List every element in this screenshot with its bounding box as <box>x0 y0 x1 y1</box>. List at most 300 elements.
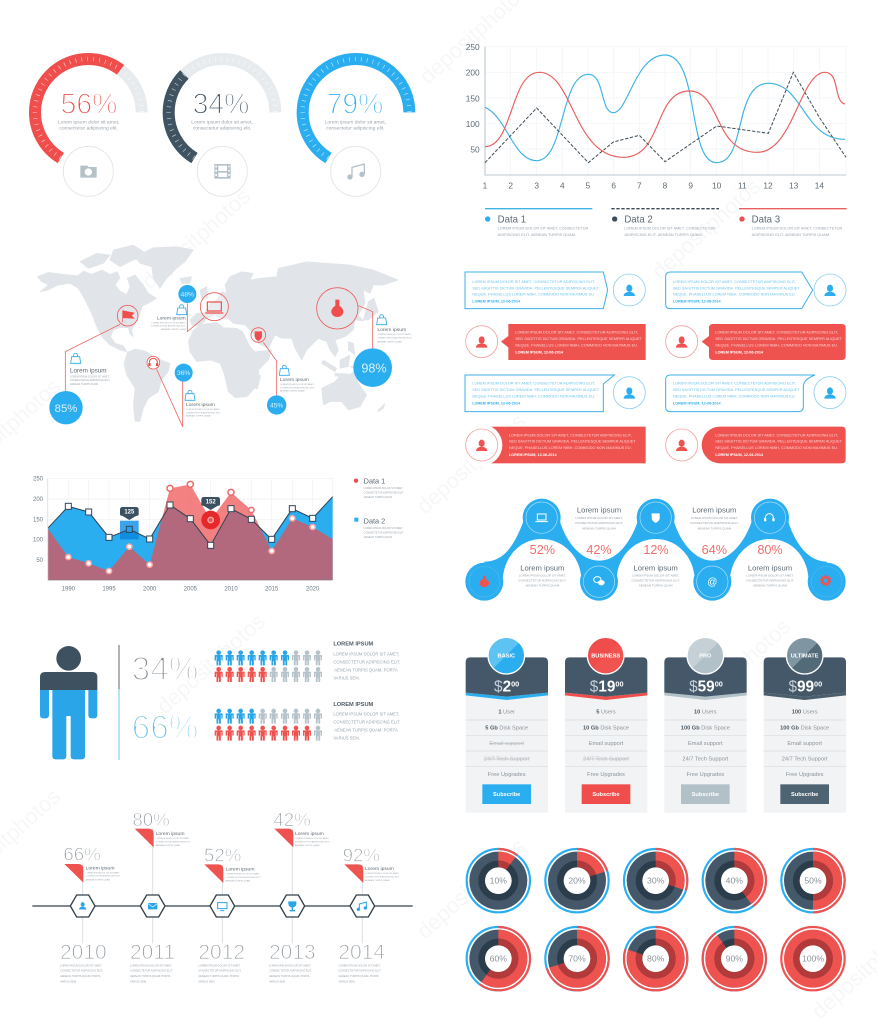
text: bottom 1: Lorem ipsum <box>520 563 564 572</box>
legend: data 3 <box>739 209 847 237</box>
plan: ultimate: $99 <box>788 679 814 696</box>
plan: ultimate: Free Upgrades <box>786 772 824 778</box>
x axis labels: 2015 <box>265 587 279 593</box>
text: bottom 2: LOREM IPSUM DOLOR SIT AMET, <box>632 573 679 577</box>
callout: 48%: CONSECTETUR ADIPISCING ELIT. <box>151 325 186 328</box>
panel: world map <box>37 245 413 427</box>
x axis labels: 1995 <box>102 587 116 593</box>
legend: data 3: ADIPISCING ELIT. AENEAN TURPIS QUAM <box>752 233 829 237</box>
bubble: blue arrow rounded: SED SAGITTIS DICTUM GRAVIDA. PELLENTESQUE SEMPER ALIQUET <box>673 286 800 290</box>
plan: pro: Free Upgrades <box>686 772 724 778</box>
plan: basic: Subscribe <box>493 792 520 798</box>
legend: data 2: LOREM IPSUM DOLOR SIT AMET, <box>364 527 403 530</box>
callout: 36%: 36% <box>177 370 190 377</box>
milestone: 2012: 52% <box>204 845 241 866</box>
milestone: 2012: AENEAN TURPIS QUAM <box>226 880 250 883</box>
data 1 markers <box>66 481 315 574</box>
bubble: blue tail rounded: LOREM IPSUM DOLOR SIT AMET, CONSECTETUR ADIPISCING ELIT, <box>673 382 796 386</box>
callout: 48%: 48% <box>181 291 194 298</box>
x axis labels <box>62 587 320 593</box>
text: top 1 <box>575 506 623 530</box>
stat: 66%: 66% <box>132 709 198 746</box>
donut: 40%: 40% <box>726 876 743 886</box>
text: top 1: LOREM IPSUM DOLOR SIT AMET, <box>575 516 623 520</box>
bubble: red halo square <box>461 424 646 466</box>
callout: 45%: 45% <box>270 402 283 409</box>
marker: headset <box>147 356 160 369</box>
callout: 45%: Lorem ipsum <box>280 377 309 383</box>
x axis labels: 8 <box>663 181 668 191</box>
x axis labels: 1 <box>483 181 488 191</box>
text: top 1: Lorem ipsum <box>577 506 621 515</box>
y axis labels <box>33 477 44 564</box>
milestone: 2011: 2011 <box>130 941 175 964</box>
marker: laptop <box>200 293 228 321</box>
watermark: depositphotos <box>412 408 530 519</box>
donut: 40% <box>703 849 766 912</box>
series: data 2 <box>485 72 846 163</box>
divider <box>117 645 120 689</box>
bubble: blue arrow square <box>465 272 645 309</box>
plan: ultimate: 00 <box>814 679 822 688</box>
text: bottom 3: CONSECTETUR ADIPISCING ELIT, <box>746 578 794 582</box>
legend: data 2 <box>354 516 404 539</box>
gauge: 79%: 79% <box>327 88 383 120</box>
plan: business: $19 <box>590 679 615 696</box>
milestone: 2013: LOREM IPSUM DOLOR SIT AMET, <box>269 963 311 967</box>
y axis labels <box>466 42 480 154</box>
percentages: 80% <box>757 543 783 557</box>
plan: pro: PRO <box>699 654 712 660</box>
callout: 45%: AENEAN TURPIS QUAM <box>280 390 305 393</box>
legend: data 1 <box>354 476 404 499</box>
milestone: 2011: AENEAN TURPIS QUAM <box>156 844 180 847</box>
plan: ultimate: Email support <box>787 741 822 747</box>
milestone: 2012: LOREM IPSUM DOLOR SIT AMET, <box>226 873 260 876</box>
x axis labels: 13 <box>789 181 799 191</box>
x axis labels: 10 <box>712 181 722 191</box>
plan: basic: 1 User <box>498 710 515 716</box>
milestone: 2011: AENEAN TURPIS QUAM, PORTA <box>130 974 171 978</box>
text block 2: LOREM IPSUM DOLOR SIT AMET, <box>333 712 399 717</box>
bubble: blue arrow square: SED SAGITTIS DICTUM GRAVIDA. PELLENTESQUE SEMPER ALIQUET <box>472 286 600 290</box>
percentages <box>530 543 783 557</box>
callout: 98%: CONSECTETUR ADIPISCING ELIT. <box>377 337 413 340</box>
icon: music <box>347 164 365 180</box>
bubble: blue arrow rounded: LOREM IPSUM DOLOR SIT AMET, CONSECTETUR ADIPISCING ELIT, <box>673 280 796 284</box>
bubble: blue arrow square: LOREM IPSUM, 12-06-2014 <box>472 299 521 303</box>
legend: data 1: AENEAN TURPIS QUAM <box>364 496 392 499</box>
highlight band at 1997 <box>120 521 139 539</box>
milestone: 2014: VARIUS SEM. <box>338 979 356 983</box>
big person figure <box>40 646 97 759</box>
data 2 outline <box>48 497 333 545</box>
donut: 80% <box>624 927 687 990</box>
plan: business: Email support <box>589 741 624 747</box>
text: top 2: CONSECTETUR ADIPISCING ELIT, <box>690 521 739 525</box>
map continents <box>37 245 398 422</box>
text block 2: VARIUS SEM. <box>333 736 360 741</box>
node: laptop <box>523 499 561 537</box>
y axis labels: 250 <box>33 477 44 483</box>
text: bottom 2: Lorem ipsum <box>634 563 678 572</box>
donut: 80%: 80% <box>647 954 665 964</box>
milestone: 2013: 2013 <box>269 941 316 964</box>
text block 1: LOREM IPSUM DOLOR SIT AMET, <box>333 651 399 656</box>
bubble: blue arrow rounded: LOREM IPSUM, 12-06-2014 <box>673 299 722 303</box>
milestone: 2010: Lorem ipsum <box>86 865 114 871</box>
callout: 98% <box>353 315 413 387</box>
plan: pro: 00 <box>715 679 723 688</box>
donut: 10% <box>467 849 530 912</box>
area: data 1 <box>48 484 333 580</box>
milestone: 2010: AENEAN TURPIS QUAM <box>86 878 110 881</box>
plan: ultimate: 100 Gb Disk Space <box>780 725 829 731</box>
bubble: blue arrow square: NEQUE. PHASELLUS LOREM NIBH, COMMODO NON MAXIMUS EU. <box>472 293 595 297</box>
plan: pro: 24/7 Tech Support <box>682 756 729 762</box>
plan: pro: $59 <box>689 679 715 696</box>
milestone: 2011: VARIUS SEM. <box>130 979 147 983</box>
x axis labels: 6 <box>611 181 616 191</box>
percentages: 64% <box>702 543 727 557</box>
bubble: red pill rounded <box>666 427 846 463</box>
pictogram rows 34% <box>215 650 322 682</box>
callout: 36%: LOREM IPSUM DOLOR SIT AMET, <box>186 408 221 411</box>
callout: 48%: Lorem ipsum <box>157 316 186 322</box>
watermark: depositphotos <box>137 183 255 294</box>
node: gear <box>808 563 846 601</box>
bubble: red pill rounded: LOREM IPSUM, 12-06-2014 <box>715 453 764 457</box>
icon: camera <box>80 166 97 178</box>
highlight at 2007 <box>201 511 220 529</box>
donut: 20% <box>545 849 609 912</box>
bubble: blue tail rounded: NEQUE. PHASELLUS LOREM NIBH, COMMODO NON MAXIMUS EU. <box>673 394 796 398</box>
text: top 1: AENEAN TURPIS QUAM <box>582 526 616 530</box>
legend: data 2: Data 2 <box>364 516 385 525</box>
plan: pro: 10 Users <box>694 710 717 716</box>
milestone: 2014: AENEAN TURPIS QUAM <box>365 879 390 882</box>
milestone: 2014: AENEAN TURPIS QUAM, PORTA <box>338 974 379 978</box>
donut: 100% <box>781 927 845 990</box>
legend: data 1: ADIPISCING ELIT. AENEAN TURPIS QUAM <box>498 233 575 237</box>
legend: data 2: ADIPISCING ELIT. AENEAN TURPIS QUAM <box>624 233 702 237</box>
plan: basic: 5 Gb Disk Space <box>485 725 528 731</box>
donut: 30%: 30% <box>647 876 665 886</box>
milestone: 2010 <box>60 844 121 983</box>
text: bottom 3: Lorem ipsum <box>748 563 792 572</box>
milestone: 2013: VARIUS SEM. <box>269 979 286 983</box>
milestone: 2013: LOREM IPSUM DOLOR SIT AMET, <box>295 837 330 840</box>
milestone: 2014: 92% <box>343 845 380 866</box>
milestone: 2011: CONSECTETUR ADIPISCING ELIT. <box>156 840 191 843</box>
gauge: 79%: consectetur adipiscing elit. <box>326 125 385 131</box>
milestone: 2012: CONSECTETUR ADIPISCING ELIT. <box>226 876 261 879</box>
callout: 48% <box>151 285 196 331</box>
panel: radial gauges <box>35 59 409 196</box>
y axis labels: 200 <box>33 497 44 503</box>
milestone: 2014: 2014 <box>338 941 385 964</box>
text: bottom 2: CONSECTETUR ADIPISCING ELIT, <box>632 578 680 582</box>
donut: 60% <box>467 927 530 990</box>
milestone: 2012: AENEAN TURPIS QUAM, PORTA <box>198 974 239 978</box>
panel: people statistics <box>40 642 401 760</box>
milestone: 2014: CONSECTETUR ADIPISCING ELIT. <box>365 875 400 878</box>
donut: 90%: 90% <box>726 954 743 964</box>
x axis labels: 2005 <box>184 587 198 593</box>
milestone: 2011: Lorem ipsum <box>156 831 184 837</box>
plan: business: 24/7 Tech Support <box>583 756 629 762</box>
x axis labels: 11 <box>738 181 747 191</box>
text block 1 <box>333 642 401 680</box>
x axis labels <box>483 181 824 191</box>
y axis labels: 150 <box>33 517 44 523</box>
plan: ultimate <box>764 637 846 813</box>
x axis labels: 14 <box>815 181 824 191</box>
gauge: 56%: 56% <box>61 88 117 120</box>
legend: data 2: CONSECTETUR ADIPISCING ELIT. <box>364 531 404 534</box>
text: bottom 1: AENEAN TURPIS QUAM <box>525 584 560 588</box>
callout: 85% <box>49 353 110 424</box>
gauge: 79% <box>303 59 409 196</box>
legend: data 1: LOREM IPSUM DOLOR SIT AMET, CONSECTETUR <box>498 227 589 231</box>
legend: data 2: Data 2 <box>624 215 653 226</box>
text block 2: AENEAN TURPIS QUAM, PORTA <box>334 728 398 733</box>
x axis labels: 2010 <box>224 587 238 593</box>
bubble: blue tail square <box>465 375 645 412</box>
stat: 34%: 34% <box>132 651 198 688</box>
milestone: 2013: Lorem ipsum <box>295 831 324 837</box>
x axis labels: 9 <box>688 181 693 191</box>
milestone: 2011 <box>130 809 191 983</box>
milestone: 2010: CONSECTETUR ADIPISCING ELIT. <box>86 875 121 878</box>
bubble: blue tail rounded: LOREM IPSUM, 12-06-2014 <box>673 401 722 405</box>
callout: 45%: CONSECTETUR ADIPISCING ELIT. <box>280 386 315 389</box>
plan: basic: Free Upgrades <box>488 772 526 778</box>
callout: 85%: Lorem ipsum <box>70 367 107 374</box>
milestone: 2010: VARIUS SEM. <box>60 979 77 983</box>
gauge: 34%: consectetur adipiscing elit. <box>193 125 251 131</box>
text: bottom 3: AENEAN TURPIS QUAM <box>753 584 787 588</box>
text: top 2: Lorem ipsum <box>692 506 736 515</box>
x axis labels: 2000 <box>143 587 157 593</box>
text block 1: AENEAN TURPIS QUAM, PORTA <box>334 667 398 672</box>
panel: testimonial bubbles <box>461 272 846 466</box>
text block 2: CONSECTETUR ADIPISCING ELIT. <box>333 720 401 725</box>
bubble: red halo square: LOREM IPSUM, 12-06-2014 <box>509 453 558 457</box>
marker: flask <box>317 288 358 329</box>
callout: 48%: AENEAN TURPIS QUAM <box>161 328 186 331</box>
bubble: red pill rounded: SED SAGITTIS DICTUM GRAVIDA. PELLENTESQUE SEMPER ALIQUET <box>715 440 843 444</box>
milestone: 2013: CONSECTETUR ADIPISCING ELIT, <box>269 969 312 973</box>
donut: 50%: 50% <box>804 876 822 886</box>
node: at sign: @ <box>707 577 717 588</box>
callout: 36%: AENEAN TURPIS QUAM <box>186 415 211 418</box>
legend: data 2: LOREM IPSUM DOLOR SIT AMET, CONSECTETUR <box>624 227 716 231</box>
bubble: blue arrow square: LOREM IPSUM DOLOR SIT AMET, CONSECTETUR ADIPISCING ELIT, <box>472 280 595 284</box>
panel: donut charts <box>467 849 845 990</box>
percentages: 52% <box>530 543 555 557</box>
milestone: 2013: AENEAN TURPIS QUAM <box>295 844 320 847</box>
plan: basic: 00 <box>511 679 519 688</box>
milestone: 2012: VARIUS SEM. <box>198 979 216 983</box>
text: bottom 3: LOREM IPSUM DOLOR SIT AMET, <box>746 573 794 577</box>
bubble: red arrow rounded: LOREM IPSUM DOLOR SIT AMET, CONSECTETUR ADIPISCING ELIT, <box>715 331 838 335</box>
plan: business: BUSINESS <box>591 654 620 660</box>
bubble: blue arrow rounded: NEQUE. PHASELLUS LOREM NIBH, COMMODO NON MAXIMUS EU. <box>673 293 796 297</box>
donut: 70%: 70% <box>568 954 586 964</box>
gauge: 34%: Lorem ipsum dolor sit amet, <box>191 119 253 125</box>
gauge: 56%: Lorem ipsum dolor sit amet, <box>58 119 119 125</box>
y axis labels: 200 <box>466 68 480 78</box>
panel: timeline <box>32 809 413 983</box>
milestone: 2014: Lorem ipsum <box>365 866 394 872</box>
callout: 48%: LOREM IPSUM DOLOR SIT AMET, <box>152 322 186 325</box>
watermark: depositphotos <box>647 173 765 284</box>
data 2 markers <box>65 502 316 548</box>
legend: data 2: AENEAN TURPIS QUAM <box>364 536 392 539</box>
bubble: red arrow rounded <box>666 324 846 360</box>
plan: business: 5 Users <box>596 710 616 716</box>
node: flask <box>465 563 503 601</box>
callout: 85%: LOREM IPSUM DOLOR SIT AMET, <box>70 375 110 378</box>
y axis labels: 100 <box>466 119 480 129</box>
donut: 100%: 100% <box>802 954 824 964</box>
plan: basic: $2 <box>494 679 511 696</box>
plan: basic: Email support <box>489 741 524 747</box>
milestone: 2014: LOREM IPSUM DOLOR SIT AMET, <box>338 963 381 967</box>
plan: basic: 24/7 Tech Support <box>484 756 530 762</box>
milestone: 2010: 2010 <box>60 941 107 964</box>
donut: 50% <box>781 849 845 912</box>
donut: 90% <box>703 927 766 990</box>
plan: ultimate: Subscribe <box>791 792 818 798</box>
text: bottom 2: AENEAN TURPIS QUAM <box>639 584 673 588</box>
text: bottom 1 <box>518 563 567 588</box>
donut: 30% <box>624 849 687 912</box>
y axis labels: 250 <box>466 42 480 52</box>
y axis labels: 100 <box>33 538 44 544</box>
text: bottom 3 <box>746 563 794 588</box>
gauge: 34% <box>169 59 275 196</box>
text block 2 <box>333 702 401 741</box>
node: chat <box>580 563 618 601</box>
callout: 36%: CONSECTETUR ADIPISCING ELIT. <box>186 411 221 414</box>
legend: data 1 <box>485 209 592 237</box>
bubble: red arrow rounded: NEQUE. PHASELLUS LOREM NIBH, COMMODO NON MAXIMUS EU. <box>715 343 838 347</box>
panel: line chart <box>466 42 847 237</box>
bubble: red arrow square <box>466 324 646 360</box>
milestone: 2011: CONSECTETUR ADIPISCING ELIT, <box>130 969 173 973</box>
bubble: red pill rounded: NEQUE. PHASELLUS LOREM NIBH, COMMODO NON MAXIMUS EU. <box>715 446 838 450</box>
plan: ultimate: 100 Users <box>792 710 818 716</box>
tooltip: 152: 152 <box>206 500 216 506</box>
plan: basic <box>466 637 548 813</box>
node: headset <box>751 499 789 537</box>
text: bottom 2 <box>632 563 680 588</box>
chart grid <box>485 47 846 175</box>
callout: 98%: Lorem ipsum <box>377 327 406 333</box>
milestone: 2011: 80% <box>132 809 170 830</box>
text: top 1: CONSECTETUR ADIPISCING ELIT, <box>575 521 623 525</box>
panel: tube process flow <box>465 499 846 601</box>
bubble: red arrow rounded: SED SAGITTIS DICTUM GRAVIDA. PELLENTESQUE SEMPER ALIQUET <box>715 337 843 341</box>
tube band <box>484 522 827 582</box>
x axis labels: 2020 <box>306 587 320 593</box>
milestone: 2011: LOREM IPSUM DOLOR SIT AMET, <box>130 963 172 967</box>
milestone: 2013: 42% <box>273 809 311 830</box>
plan: business: 00 <box>615 679 624 688</box>
donut: 70% <box>545 927 609 990</box>
text: top 2: AENEAN TURPIS QUAM <box>697 526 732 530</box>
milestone: 2013 <box>269 809 330 983</box>
panel: pricing tables <box>466 637 846 813</box>
bubble: blue arrow rounded <box>666 272 846 309</box>
pictogram rows 66% <box>215 709 322 741</box>
text block 1: LOREM IPSUM <box>333 642 374 648</box>
plan: business <box>565 637 647 813</box>
bubble: red arrow square: NEQUE. PHASELLUS LOREM NIBH, COMMODO NON MAXIMUS EU. <box>515 343 638 347</box>
gauge: 34%: 34% <box>193 88 249 120</box>
milestone: 2013: CONSECTETUR ADIPISCING ELIT. <box>295 840 330 843</box>
percentages: 42% <box>586 543 612 557</box>
panel: area chart <box>33 476 404 593</box>
bubble: red halo square: NEQUE. PHASELLUS LOREM NIBH, COMMODO NON MAXIMUS EU. <box>509 446 632 450</box>
milestone: 2012: 2012 <box>198 941 245 964</box>
gauge: 56%: consectetur adipiscing elit. <box>59 125 118 131</box>
tooltip: 125: 125 <box>124 510 135 516</box>
plan: pro: 100 Gb Disk Space <box>681 725 730 731</box>
milestone: 2014: CONSECTETUR ADIPISCING ELIT, <box>338 969 382 973</box>
plan: business: Free Upgrades <box>587 772 625 778</box>
text: top 2: LOREM IPSUM DOLOR SIT AMET, <box>691 516 738 520</box>
legend: data 3: LOREM IPSUM DOLOR SIT AMET, CONSECTETUR <box>752 227 843 231</box>
milestone: 2014: LOREM IPSUM DOLOR SIT AMET, <box>365 872 400 875</box>
bubble: red arrow rounded: LOREM IPSUM, 12-06-2014 <box>715 350 764 354</box>
text: top 2 <box>690 506 739 530</box>
callout: 36% <box>175 364 221 418</box>
callout: 98%: LOREM IPSUM DOLOR SIT AMET, <box>377 333 412 336</box>
bubble: blue tail square: NEQUE. PHASELLUS LOREM NIBH, COMMODO NON MAXIMUS EU. <box>472 394 595 398</box>
bubble: red arrow square: LOREM IPSUM DOLOR SIT AMET, CONSECTETUR ADIPISCING ELIT, <box>515 331 638 335</box>
bubble: blue tail rounded <box>666 375 846 412</box>
marker: flag <box>117 305 138 326</box>
x axis labels: 3 <box>534 181 539 191</box>
tooltip: 152 <box>201 497 220 510</box>
area: data 2 <box>48 497 333 580</box>
y axis labels: 50 <box>470 144 480 154</box>
callout: 36%: Lorem ipsum <box>186 402 215 408</box>
bubble: blue tail square: SED SAGITTIS DICTUM GRAVIDA. PELLENTESQUE SEMPER ALIQUET <box>472 388 600 392</box>
callout: 85%: CONSECTETUR ADIPISCING ELIT. <box>70 379 110 382</box>
milestone: 2012 <box>198 845 261 983</box>
watermark: depositphotos <box>412 833 530 944</box>
plan: business: Subscribe <box>592 792 620 798</box>
plan: basic: BASIC <box>498 654 515 660</box>
legend: data 1: Data 1 <box>364 476 385 485</box>
plan: pro <box>664 637 747 813</box>
donut: 60%: 60% <box>490 954 507 964</box>
y axis labels: 150 <box>466 93 480 103</box>
milestone: 2012: Lorem ipsum <box>226 867 254 873</box>
bubble: red arrow square: SED SAGITTIS DICTUM GRAVIDA. PELLENTESQUE SEMPER ALIQUET <box>515 337 643 341</box>
text: bottom 1: CONSECTETUR ADIPISCING ELIT, <box>518 578 567 582</box>
milestone: 2010: AENEAN TURPIS QUAM, PORTA <box>60 974 101 978</box>
plan: business: 10 Gb Disk Space <box>583 725 629 731</box>
node: shield <box>637 499 675 537</box>
callout: 45% <box>267 365 315 415</box>
watermark: depositphotos <box>677 613 795 724</box>
text block 2: LOREM IPSUM <box>333 702 374 708</box>
